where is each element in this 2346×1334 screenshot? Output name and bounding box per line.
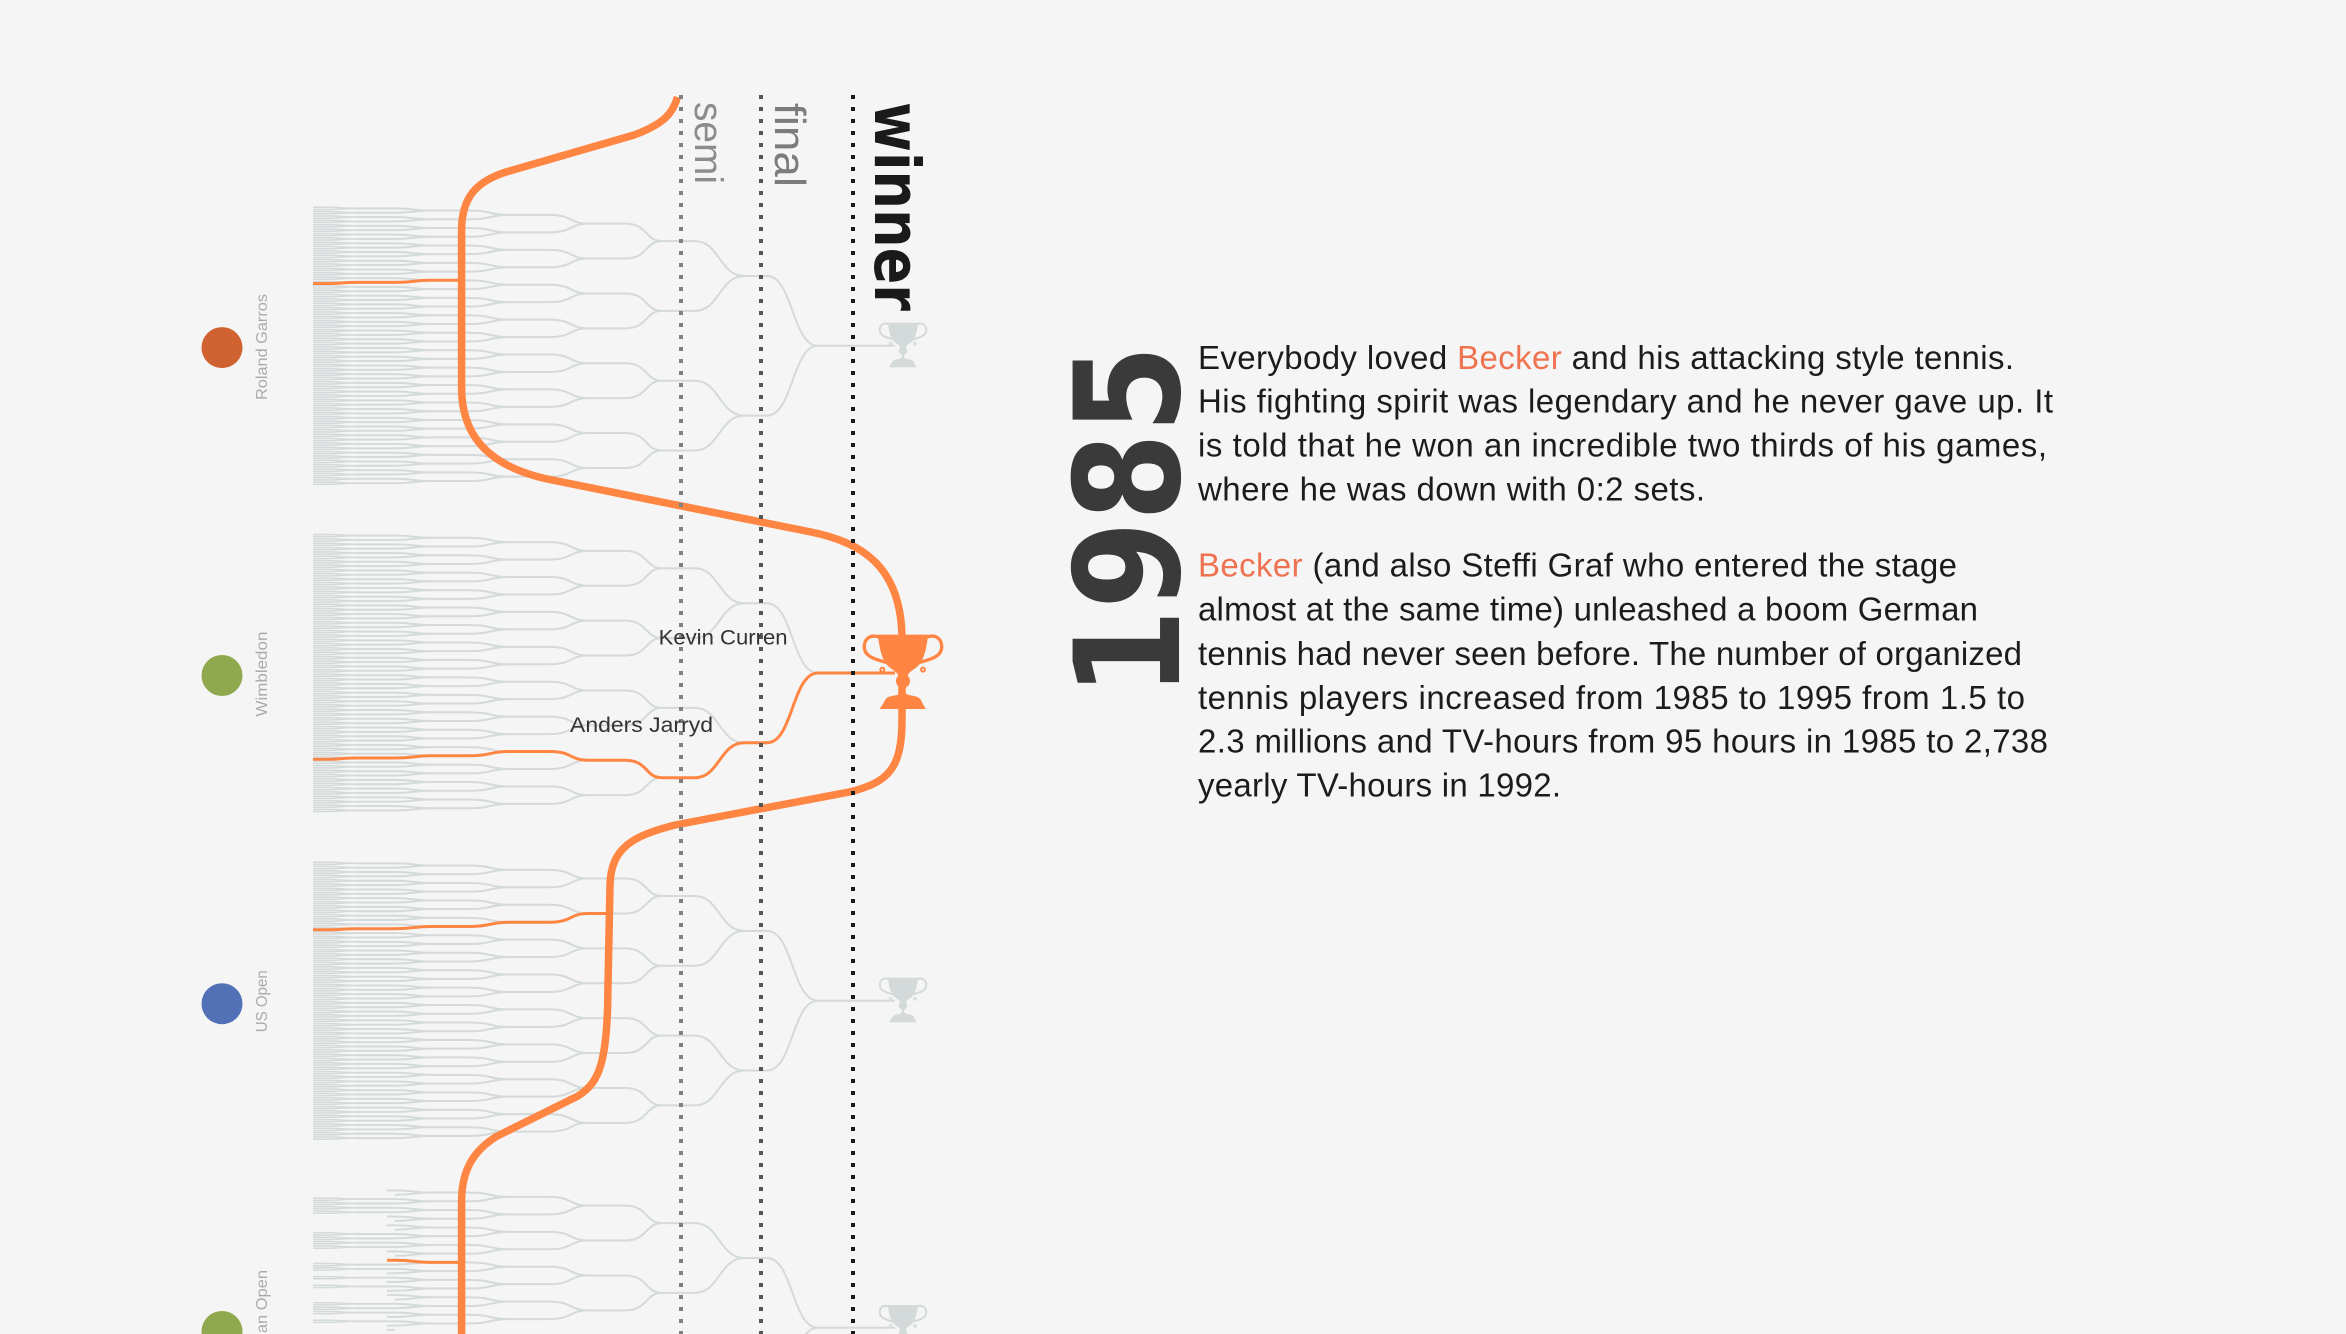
text block: first paragraph: [1197, 339, 2053, 508]
label: Anders Jarryd: Anders Jarryd: [570, 714, 713, 737]
text block: second paragraph: yearly TV-hours in 1992.: [1198, 767, 1561, 804]
thick career line: out of Wimbledon trophy downward: [462, 680, 902, 1334]
text block: second paragraph: almost at the same time) unleashed a boom German: [1198, 591, 1978, 628]
bracket: Roland Garros draw: [313, 207, 895, 484]
path: Becker US Open exit: [313, 913, 607, 930]
panel: Wimbledon tournament marker: [202, 632, 271, 717]
text block: second paragraph: 2.3 millions and TV-hours from 95 hours in 1985 to 2,738: [1198, 723, 2048, 760]
round line: semi: [679, 95, 683, 1334]
path: Becker Wimbledon run to the title: [313, 673, 895, 778]
trophy icon: US Open (grey): [880, 978, 926, 1022]
label: Kevin Curren: Kevin Curren: [659, 626, 788, 649]
text block: second paragraph: Becker (and also Steffi Graf who entered the stage: [1198, 547, 1957, 584]
text block: first paragraph: is told that he won an incredible two thirds of his games,: [1198, 427, 2047, 464]
trophy icon: Australian Open (grey): [880, 1305, 926, 1334]
bracket: Australian Open draw: [313, 1190, 895, 1334]
text block: first paragraph: Everybody loved Becker and his attacking style tennis.: [1198, 339, 2014, 376]
round line: final: [759, 95, 763, 1334]
legend dot: Roland Garros: [202, 327, 242, 368]
text block: second paragraph: tennis had never seen before. The number of organized: [1198, 635, 2022, 672]
label: Wimbledon: Wimbledon: [254, 632, 271, 717]
panel: Roland Garros tournament marker: [202, 294, 271, 400]
panel: Australian Open tournament marker: [202, 1270, 271, 1334]
text block: second paragraph: [1198, 547, 2048, 804]
legend dot: Wimbledon: [202, 655, 242, 696]
legend dot: US Open: [202, 983, 242, 1024]
year heading: 1985: 1985: [1044, 345, 1214, 697]
panel: US Open tournament marker: [202, 970, 271, 1032]
text block: first paragraph: where he was down with 0:2 sets.: [1197, 471, 1705, 508]
trophy icon: Roland Garros (grey): [880, 323, 926, 367]
bracket: US Open draw: [313, 862, 895, 1139]
text block: second paragraph: tennis players increased from 1985 to 1995 from 1.5 to: [1198, 679, 2025, 716]
path: Becker Roland Garros exit: [313, 280, 461, 284]
round heading: semi: semi: [686, 102, 730, 184]
round heading: final: final: [765, 103, 814, 187]
path: Becker Australian Open exit: [387, 1260, 461, 1262]
label: US Open: US Open: [254, 970, 271, 1032]
round line: winner: [851, 95, 855, 1334]
legend dot: Australian Open: [202, 1311, 242, 1334]
round heading: winner: winner: [860, 102, 933, 311]
trophy icon: Wimbledon winner (orange): [864, 635, 942, 709]
thick career line: into Wimbledon trophy from above: [462, 97, 902, 660]
text block: first paragraph: His fighting spirit was legendary and he never gave up. It: [1198, 383, 2053, 420]
label: Roland Garros: Roland Garros: [254, 294, 271, 400]
infographic: 1985 tennis grand slam brackets: [202, 95, 2053, 1334]
bracket: Wimbledon draw: [313, 534, 895, 812]
